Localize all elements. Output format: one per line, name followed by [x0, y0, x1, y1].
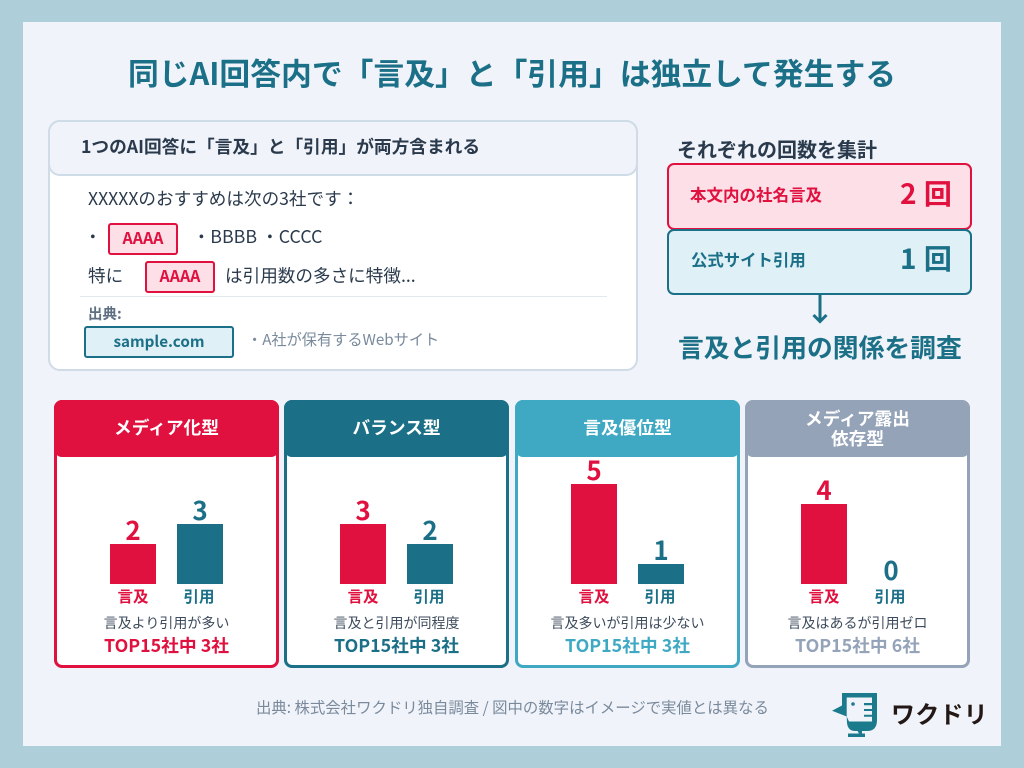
- card 2 mention value: 3: [355, 490, 371, 528]
- card 2 header: バランス型: [352, 414, 441, 440]
- card 4 count: TOP15社中 6社: [795, 632, 920, 658]
- card 1 header: [54, 400, 279, 457]
- card 4 mention value: 4: [816, 470, 832, 508]
- card 4 mention bar: [801, 504, 847, 584]
- bullet: ・: [84, 224, 102, 249]
- card 2: balanced type: [284, 400, 509, 668]
- heading: tally: それぞれの回数を集計: [677, 134, 877, 163]
- logo icon: [832, 693, 877, 737]
- card 2 citation bar: [407, 544, 453, 584]
- tally box: citations: [667, 229, 972, 295]
- source footnote: 出典: 株式会社ワクドリ独自調査 / 図中の数字はイメージで実値とは異なる: [256, 696, 769, 718]
- card 2 citation value: 2: [422, 510, 438, 548]
- card 1 count: TOP15社中 3社: [104, 632, 229, 658]
- tally value: citations: 1 回: [900, 238, 952, 278]
- card 4: media exposure dependent type: [745, 400, 970, 668]
- card 1 citation bar: [177, 524, 223, 584]
- card 3 citation label: 引用: [644, 585, 676, 607]
- tally label: citations: 公式サイト引用: [691, 247, 806, 271]
- card 3 header: 言及優位型: [583, 414, 672, 440]
- card 1 header: メディア化型: [114, 414, 219, 440]
- card 2 header: [284, 400, 509, 457]
- source label: 出典:: [88, 303, 122, 324]
- panel heading text: 1つのAI回答に「言及」と「引用」が両方含まれる: [81, 133, 480, 159]
- card 3 mention label: 言及: [578, 585, 610, 607]
- card 3 citation value: 1: [653, 530, 669, 568]
- arrow down: [812, 295, 828, 324]
- card 2 description: 言及と引用が同程度: [334, 613, 460, 633]
- card 4 citation label: 引用: [874, 585, 906, 607]
- tally label: mentions: 本文内の社名言及: [690, 182, 822, 206]
- answer line 3 end: は引用数の多さに特徴...: [225, 263, 416, 288]
- card 3 mention bar: [571, 484, 617, 584]
- tally value: mentions: 2 回: [900, 173, 952, 213]
- source note: ・A社が保有するWebサイト: [247, 328, 439, 350]
- tally box: mentions: [667, 163, 972, 230]
- card 3 header: [515, 400, 740, 457]
- panel heading: [48, 120, 638, 176]
- card 1: media type: [54, 400, 279, 668]
- card 3 mention value: 5: [586, 450, 602, 488]
- card 3 description: 言及多いが引用は少ない: [550, 613, 704, 633]
- card 2 count: TOP15社中 3社: [334, 632, 459, 658]
- card 1 mention label: 言及: [117, 585, 148, 607]
- card 3 citation bar: [638, 564, 684, 584]
- tag: AAAA mention: [108, 223, 178, 255]
- card 3 count: TOP15社中 3社: [565, 632, 690, 658]
- card 2 citation label: 引用: [413, 585, 444, 607]
- conclusion: 言及と引用の関係を調査: [678, 328, 962, 365]
- source tag: sample.com: sample.com: [114, 330, 204, 352]
- card 4 header: [745, 400, 970, 457]
- card 4 header: メディア露出: [805, 405, 910, 431]
- answer line 1: XXXXXのおすすめは次の3社です：: [88, 186, 359, 211]
- answer line 3 start: 特に: [88, 263, 123, 288]
- answer line 2 remainder: ・BBBB ・CCCC: [192, 223, 322, 249]
- tag: AAAA mention second: AAAA: [160, 263, 200, 287]
- tag: AAAA mention second: [145, 261, 215, 293]
- card 2 mention label: 言及: [347, 585, 378, 607]
- logo: Wakudori: [832, 693, 988, 737]
- card 2 mention bar: [340, 524, 386, 584]
- card 1 citation value: 3: [192, 490, 208, 528]
- title: 同じAI回答内で「言及」と「引用」は独立して発生する: [128, 49, 896, 94]
- tag: AAAA mention: AAAA: [123, 225, 163, 249]
- card 1 description: 言及より引用が多い: [104, 613, 229, 633]
- card 4 mention label: 言及: [808, 585, 840, 607]
- card 4 header: 依存型: [831, 425, 884, 451]
- card 4 description: 言及はあるが引用ゼロ: [788, 613, 928, 633]
- panel: AI answer example: [48, 120, 638, 371]
- source tag: sample.com: [84, 326, 234, 358]
- card 3: mention dominant type: [515, 400, 740, 668]
- card 4 citation value: 0: [883, 550, 899, 588]
- logo wordmark: ワクドリ: [891, 695, 988, 730]
- card 1 mention value: 2: [125, 510, 141, 548]
- card 1 citation label: 引用: [183, 585, 214, 607]
- card 1 mention bar: [110, 544, 156, 584]
